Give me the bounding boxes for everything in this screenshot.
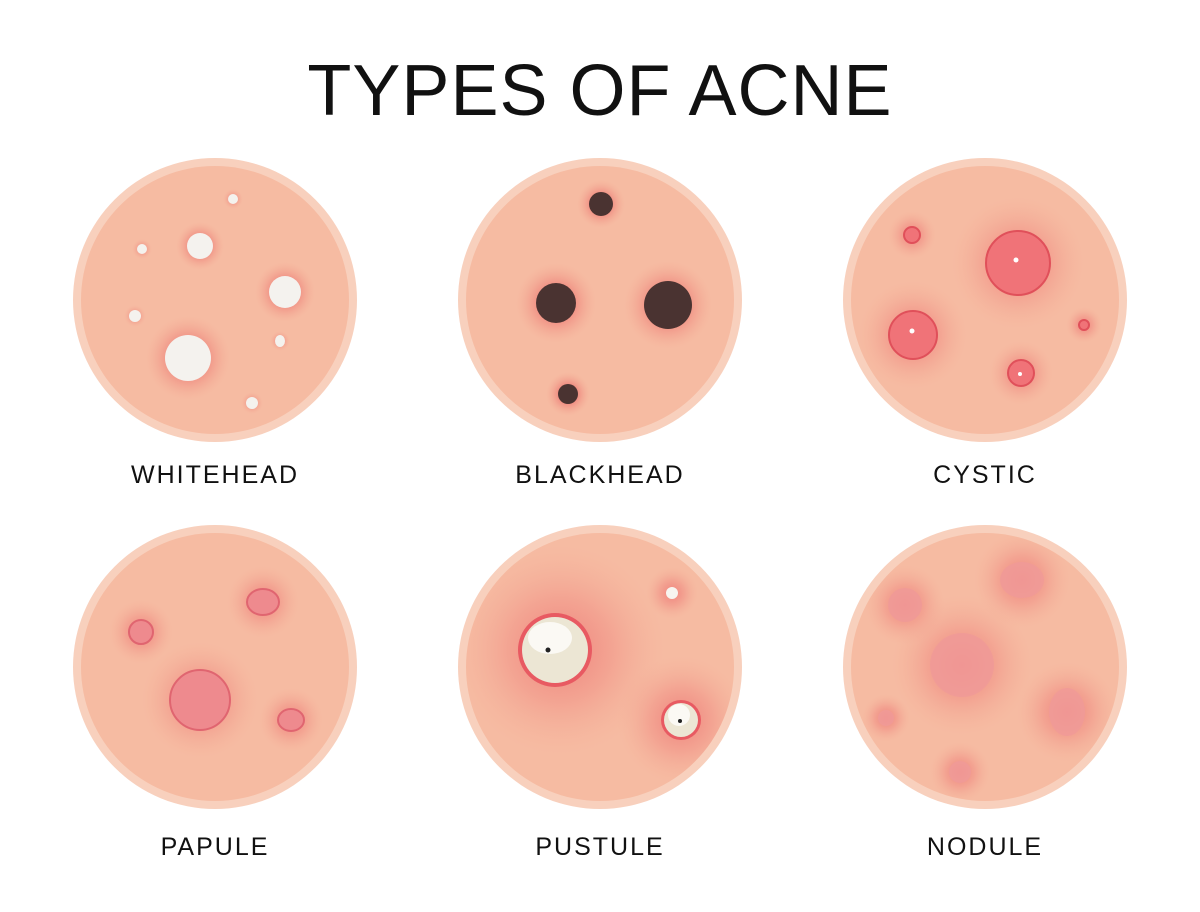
- label: nodule: NODULE: [927, 833, 1043, 861]
- label: cystic: CYSTIC: [933, 461, 1037, 489]
- panel: whitehead: [73, 158, 357, 489]
- panel: pustule: [455, 525, 745, 861]
- panel: cystic: [843, 158, 1127, 489]
- label: pustule: PUSTULE: [535, 833, 665, 861]
- label: papule: PAPULE: [161, 833, 269, 861]
- panel: blackhead: [458, 158, 742, 489]
- panel: papule: [73, 525, 357, 861]
- label: whitehead: WHITEHEAD: [131, 461, 299, 489]
- label: blackhead: BLACKHEAD: [515, 461, 685, 489]
- title: TYPES OF ACNE: [307, 51, 893, 131]
- panel: nodule: [843, 525, 1127, 861]
